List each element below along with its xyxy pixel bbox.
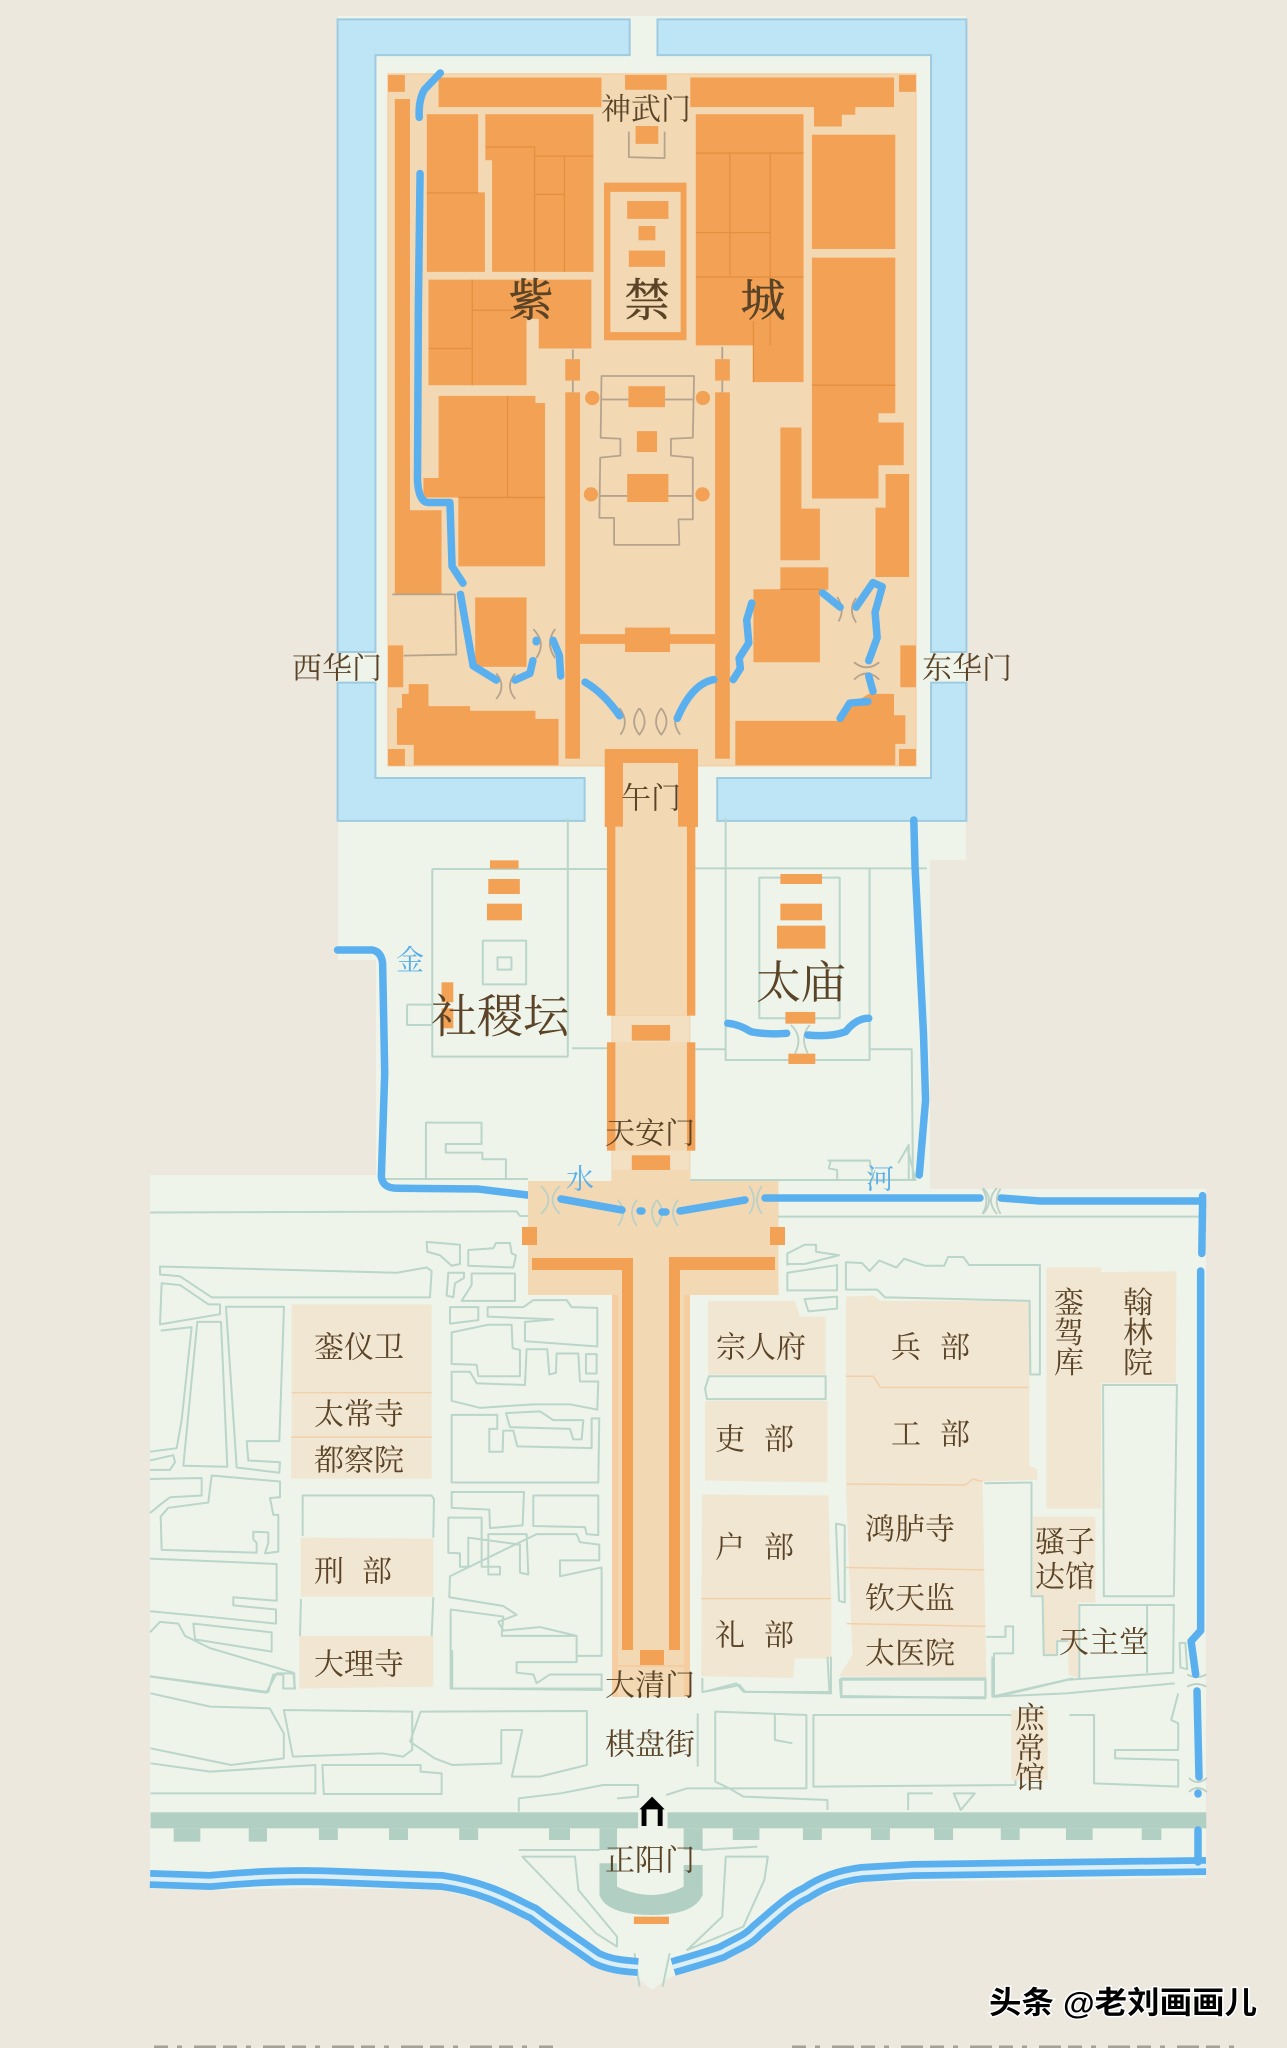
Imperial offices west: tan blocks [291,1304,433,1688]
label: Shejitan: 社稷坛 [431,992,570,1042]
label: Jin: 金 [396,944,424,976]
icon: gate tower [639,1797,665,1826]
label: Zongren Fu: 宗人府 [716,1332,806,1364]
label: Luanjia Ku: 驾 [1054,1316,1084,1350]
label: Ministry of Works: 工部 [891,1418,970,1452]
building dividing lines [427,147,895,589]
city wall with merlons [151,1812,1206,1850]
palace buildings [388,75,916,766]
label: Luanyi Wei: 銮仪卫 [314,1332,404,1364]
Jinshui bridges and river in front of Tiananmen [541,1186,1202,1226]
label: Hanlin Yuan: 林 [1123,1316,1153,1350]
south canal twin channels [150,1691,1206,1967]
Imperial offices east: tan blocks [701,1268,1177,1678]
label: Hanlin Yuan: 院 [1123,1346,1153,1380]
label: Xihua gate: 西华门 [292,652,382,686]
label: Ministry of Justice: 刑部 [314,1556,392,1588]
stone bridges inside the palace [496,597,879,735]
street outlines west district [150,1211,602,1692]
inner palace streams [417,73,882,718]
label: Qintian Jian: 钦天监 [865,1582,955,1616]
label: Shuchang Guan: 常 [1015,1732,1045,1766]
label: Taimiao: 太庙 [756,958,846,1008]
imperial way: Wumen to Tiananmen [607,827,695,1182]
label: Qipan Street: 棋盘街 [605,1728,695,1762]
label: Zhengyang gate: 正阳门 [605,1844,695,1878]
Jinshui river north arm [914,820,926,1175]
street outlines east district [702,1150,1206,1697]
label: Taichang Si: 太常寺 [314,1398,404,1432]
label: Duchayuan: 都察院 [314,1444,404,1478]
Shejitan halls [442,860,522,1028]
outlines: Shejitan and Taimiao precincts [338,818,927,1197]
label: Shuchang Guan: 庶 [1015,1702,1045,1734]
label: Wu gate: 午门 [621,782,681,816]
label: Tianzhu Tang: 天主堂 [1059,1626,1149,1660]
watermark: 头条 @老刘画画儿 [989,1986,1257,2020]
label: Hanlin Yuan: 翰 [1123,1286,1153,1320]
Taimiao stream [728,1018,869,1036]
label: Ministry of Personnel: 吏部 [715,1424,794,1456]
label: Dali Si: 大理寺 [314,1648,404,1682]
land: light city ground [150,16,1206,1990]
label: Ministry of Revenue: 户部 [715,1532,794,1564]
Tiananmen square T-shaped court [522,1170,785,1697]
street outlines south district [151,1650,1206,1987]
label: Forbidden City: 紫禁城 [508,276,786,326]
label: Shenwu gate: 神武门 [601,94,691,126]
canal on east side [1191,1196,1203,1674]
Taimiao halls [777,874,825,1064]
label: Tiananmen: 天安门 [605,1118,695,1150]
label: Taiyi Yuan: 太医院 [865,1638,955,1670]
canal bridges at the southeast corner [1189,1778,1207,1792]
labels: offices [314,1286,1153,1878]
label: Donghua gate: 东华门 [922,652,1012,686]
panel: Forbidden City palace grounds [388,73,916,766]
label: He: 河 [866,1164,894,1196]
labels: gates and palace [292,94,1012,1196]
label: Ministry of War: 兵部 [891,1332,970,1364]
label: Luanjia Ku: 銮 [1054,1286,1084,1320]
label: Ministry of Rites: 礼部 [715,1620,794,1652]
hall terrace outline [392,132,722,656]
Taimiao bridge [791,1025,810,1053]
moat around the palace [338,19,966,821]
label: Luanjia Ku: 库 [1054,1346,1084,1380]
building: Shuchang Guan [1011,1710,1048,1780]
label: Saozida Guan: 达馆 [1035,1560,1095,1594]
label: Shuchang Guan: 馆 [1015,1762,1045,1794]
label: Honglu Si: 鸿胪寺 [865,1514,955,1546]
label: Shui: 水 [566,1164,594,1196]
label: Daqing gate: 大清门 [605,1670,695,1702]
Zhengyang gate barbican [599,1863,703,1915]
Zhengyang arrow tower [634,1917,669,1924]
Wumen gate [605,749,698,833]
label: Saozida Guan: 骚子 [1035,1526,1095,1558]
Jinshui bridge on east arm [983,1189,1206,1687]
Jinshui river west arm [338,950,540,1197]
